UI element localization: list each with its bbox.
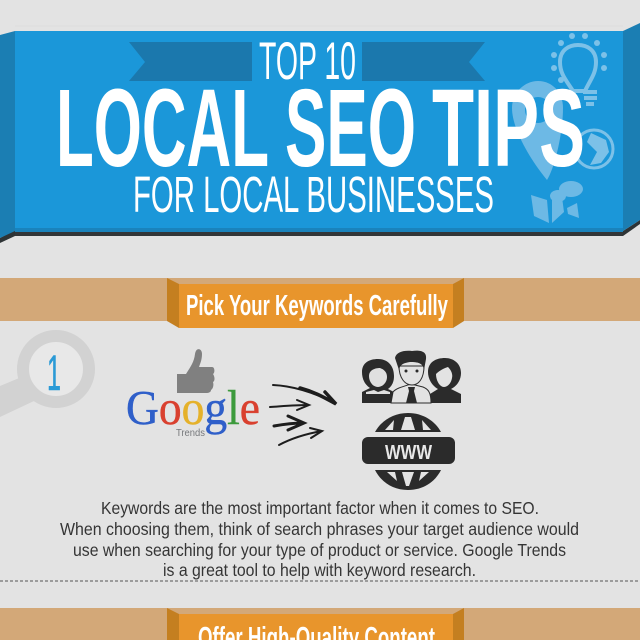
icon: map and speech bubbles bbox=[531, 181, 583, 223]
logo: google trends: Google bbox=[126, 380, 260, 435]
body text bbox=[60, 498, 579, 580]
person: left woman bbox=[362, 359, 394, 403]
ribbon: right bbox=[362, 42, 485, 81]
header banner bbox=[0, 23, 640, 243]
label: www: WWW bbox=[385, 442, 432, 464]
title: top 10: TOP 10 bbox=[259, 32, 356, 91]
title: local seo tips: SEO bbox=[285, 67, 416, 190]
section heading band: tip 2 bbox=[0, 608, 640, 640]
heading: pick your keywords carefully: Pick Your Keywords Carefully bbox=[186, 290, 448, 322]
label: trends: Trends bbox=[176, 427, 205, 439]
icon: light bulb bbox=[551, 33, 607, 104]
person: centre man bbox=[391, 351, 431, 403]
icon: map pin bbox=[512, 81, 563, 180]
icon: people group bbox=[362, 351, 461, 403]
title: local seo tips: LOCAL bbox=[56, 67, 269, 190]
icon: globe bbox=[575, 130, 613, 168]
body text: is a great tool to help with keyword research. bbox=[163, 560, 476, 580]
section heading band: tip 1 bbox=[0, 278, 640, 328]
icon: thumbs up bbox=[177, 349, 214, 393]
icon: www globe bbox=[362, 413, 455, 490]
body text: Keywords are the most important factor when it comes to SEO. bbox=[101, 498, 539, 518]
body text: When choosing them, think of search phrases your target audience would bbox=[60, 519, 579, 539]
person: right woman bbox=[428, 358, 461, 403]
number 1: 1 bbox=[47, 345, 61, 401]
body text: use when searching for your type of product or service. Google Trends bbox=[73, 540, 566, 560]
icon: sketched arrows bbox=[270, 385, 336, 445]
ribbon: left bbox=[129, 42, 252, 81]
icon: magnifier with number 1 bbox=[0, 336, 89, 417]
